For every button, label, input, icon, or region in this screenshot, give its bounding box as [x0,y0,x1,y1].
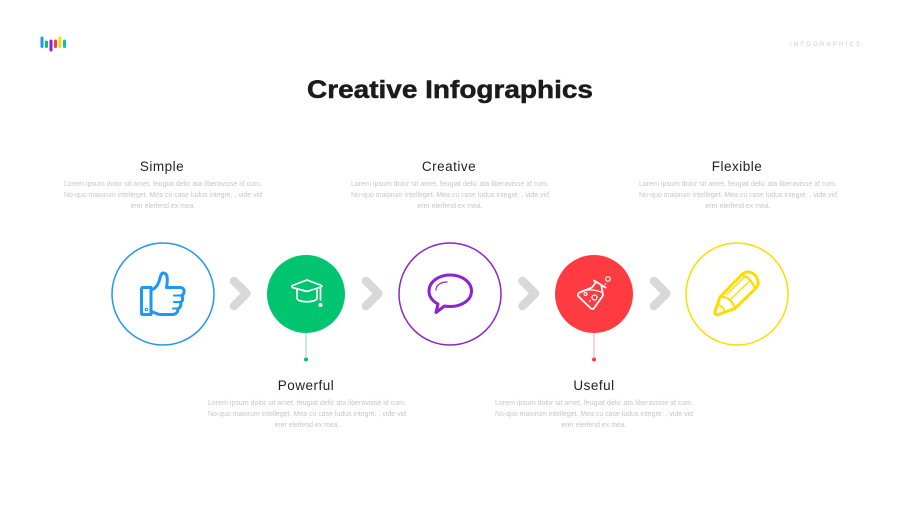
text block: Simple [64,159,262,210]
logo [42,38,64,50]
text block: Flexible: No-quo maiorum intelleget. Mea cu case ludus integre. , vide vid [639,192,837,199]
text block: Powerful: Powerful [278,378,334,393]
arrow 2 [366,281,378,306]
text block: Flexible: Lorem ipsum dolor sit amet, feugiat delic ata liberavisse id cum. [639,181,837,188]
text block: Useful: Lorem ipsum dolor sit amet, feugiat delic ata liberavisse id cum. [495,400,693,407]
connector line [305,333,307,359]
arrow 1 [234,281,246,306]
step: flask [555,255,633,362]
title: Creative Infographics [307,76,593,104]
icon: graduation cap [292,280,322,307]
arrow 4 [654,281,666,306]
connector line [593,333,595,359]
icon: pencil [715,272,758,315]
text block: Simple: erer eleifend ex mea. [130,203,196,210]
text block: Powerful [208,378,406,429]
step: pencil [686,243,788,345]
text block: Flexible [639,159,837,210]
text block: Flexible: erer eleifend ex mea. [706,203,771,210]
text block: Simple: Lorem ipsum dolor sit amet, feugiat delic ata liberavisse id cum. [64,181,262,188]
text block: Simple: No-quo maiorum intelleget. Mea cu case ludus integre. , vide vid [64,192,262,199]
text block: Powerful: No-quo maiorum intelleget. Mea cu case ludus integre. , vide vid [208,411,406,418]
text block: Creative: Lorem ipsum dolor sit amet, feugiat delic ata liberavisse id cum. [351,181,549,188]
header label: INFOGRAPHICS [790,42,860,48]
icon: flask [578,277,610,309]
text block: Creative: No-quo maiorum intelleget. Mea cu case ludus integre. , vide vid [351,192,549,199]
text block: Creative: erer eleifend ex mea. [418,203,483,210]
text block: Powerful: Lorem ipsum dolor sit amet, feugiat delic ata liberavisse id cum. [208,400,406,407]
text block: Useful: No-quo maiorum intelleget. Mea cu case ludus integre. , vide vid [495,411,693,418]
text block: Powerful: erer eleifend ex mea. [274,422,340,429]
text block: Creative [351,159,549,210]
text block: Useful [495,378,693,429]
arrow 3 [522,281,535,306]
icon: speech bubble [429,275,472,312]
icon: thumbs up [142,273,184,314]
step: thumbs up [112,243,214,345]
text block: Useful: Useful [573,378,615,393]
step: graduation cap [267,255,345,362]
text block: Simple: Simple [140,159,184,174]
text block: Flexible: Flexible [712,159,762,174]
step: speech bubble [399,243,501,345]
text block: Useful: erer eleifend ex mea. [562,422,627,429]
text block: Creative: Creative [422,159,476,174]
